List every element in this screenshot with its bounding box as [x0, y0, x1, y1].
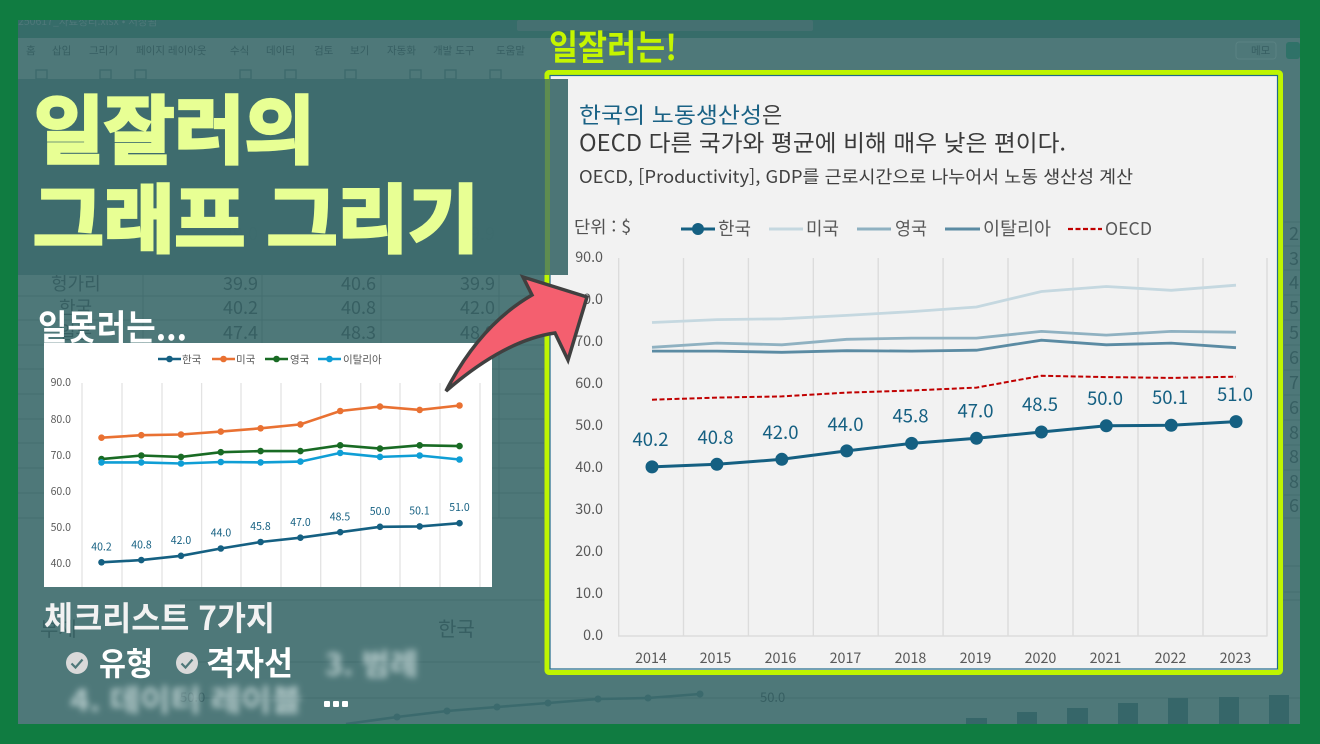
- thumbnail series: 한국: 45.8: [250, 519, 271, 534]
- faded spreadsheet background: 29.0: [223, 220, 258, 246]
- ellipsis dots: [324, 701, 348, 707]
- thumbnail series: 미국: [98, 402, 463, 441]
- thumbnail legend: [158, 352, 382, 367]
- faded spreadsheet background: 삽입: [52, 43, 71, 58]
- title text: 일잘러의: [34, 72, 315, 179]
- line chart: labour productivity: 2021: [1090, 647, 1121, 668]
- line chart: labour productivity: 50.0: [575, 414, 603, 435]
- faded spreadsheet background: 검토: [314, 43, 334, 58]
- faded spreadsheet background: 5: [1289, 319, 1299, 345]
- faded spreadsheet background: 40.2: [223, 294, 258, 320]
- thumbnail series: 한국: 50.0: [370, 504, 390, 519]
- blurred checklist item: 데이터 레이블: 4. 데이터 레이블: [70, 676, 302, 720]
- faded spreadsheet background: 40.8: [341, 294, 376, 320]
- title text: 그래프 그리기: [33, 161, 479, 268]
- chart heading: OECD 다른 국가와 평균에 비해 매우 낮은 편이다.: [579, 124, 1066, 158]
- blurred checklist item: 범례: 3. 범례: [325, 640, 418, 684]
- panel: thumbnail chart (before): 60.0: [51, 484, 71, 499]
- series: 한국: 45.8: [893, 402, 928, 428]
- legend: 영국: [895, 215, 927, 241]
- faded spreadsheet background: 한국: [59, 294, 92, 320]
- thumbnail series: 한국: 50.1: [409, 504, 430, 518]
- series: 한국: 51.0: [1217, 381, 1253, 407]
- heading: 일못러는...: 일못러는...: [38, 300, 187, 351]
- title text: [33, 72, 479, 268]
- thumbnail series: 이탈리아: [98, 450, 463, 467]
- panel: chart card with lime border: [547, 72, 1280, 672]
- faded spreadsheet background: 수식: [230, 43, 249, 58]
- faded spreadsheet background: 48.3: [341, 319, 376, 345]
- line chart: labour productivity: 10.0: [575, 582, 603, 603]
- faded spreadsheet background: 47.4: [223, 319, 258, 345]
- series: 한국: 48.5: [1022, 391, 1058, 417]
- series: 영국: [652, 331, 1236, 347]
- faded spreadsheet background: 3: [1289, 245, 1299, 271]
- series: 한국: 50.1: [1152, 384, 1188, 410]
- series: 한국: 40.8: [698, 424, 733, 450]
- checklist item: 유형: [66, 639, 153, 685]
- faded spreadsheet background: 7: [1289, 369, 1299, 395]
- faded spreadsheet background: 4: [1289, 269, 1299, 295]
- faded spreadsheet background: 부제: [40, 613, 77, 642]
- faded spreadsheet background: 개발 도구: [433, 43, 475, 58]
- series: OECD: [652, 376, 1236, 400]
- series: 한국: 47.0: [958, 398, 993, 424]
- title panel: [18, 72, 568, 275]
- faded spreadsheet background: 5: [1289, 294, 1299, 320]
- faded spreadsheet background: 보기: [350, 43, 369, 58]
- chart heading: 은: [762, 98, 782, 130]
- line chart: labour productivity: 2020: [1025, 647, 1056, 668]
- thumbnail legend: 영국: [290, 352, 310, 367]
- panel: thumbnail chart (before): 50.0: [51, 520, 71, 535]
- thumbnail series: 영국: [98, 442, 463, 462]
- line chart: labour productivity: 90.0: [575, 246, 603, 267]
- panel: thumbnail chart (before): 80.0: [51, 412, 71, 427]
- faded spreadsheet background: 6: [1289, 394, 1299, 420]
- line chart: labour productivity: 2023: [1220, 647, 1251, 668]
- faded spreadsheet background: 한국: [438, 613, 475, 642]
- thumbnail legend: 이탈리아: [343, 352, 382, 367]
- line chart: labour productivity: 20.0: [575, 540, 603, 561]
- line chart: labour productivity: 2018: [895, 647, 926, 668]
- faded spreadsheet background: 42.0: [460, 294, 495, 320]
- faded spreadsheet background: 일본: [59, 319, 92, 345]
- faded spreadsheet background: 도움말: [496, 43, 525, 58]
- faded spreadsheet background: 29.9: [460, 220, 495, 246]
- line chart: labour productivity: 2015: [700, 647, 731, 668]
- faded spreadsheet background: 29.1: [341, 220, 376, 246]
- thumbnail series: 한국: 44.0: [211, 526, 231, 540]
- line chart: labour productivity: 30.0: [575, 498, 603, 519]
- panel: thumbnail chart (before): 90.0: [51, 375, 71, 390]
- legend: 이탈리아: [983, 215, 1051, 241]
- series: 미국: [652, 285, 1236, 322]
- faded spreadsheet background: 자동화: [387, 43, 416, 58]
- line chart: labour productivity: [575, 246, 1268, 668]
- line chart: labour productivity: 2017: [830, 647, 861, 668]
- panel: thumbnail chart (before): 40.0: [51, 556, 71, 571]
- faded spreadsheet background: 39.9: [460, 270, 495, 296]
- chart heading: [579, 98, 1066, 158]
- arrow: from weak chart to good chart: [446, 277, 587, 391]
- series: 이탈리아: [652, 340, 1236, 352]
- series: 한국: 44.0: [828, 411, 863, 437]
- series: 한국: [633, 381, 1253, 473]
- thumbnail series: 한국: 48.5: [330, 510, 350, 524]
- faded spreadsheet background: 8: [1289, 419, 1299, 445]
- legend: 미국: [806, 215, 839, 241]
- thumbnail series: 한국: 47.0: [290, 515, 311, 530]
- heading: 일잘러는!: 일잘러는!: [549, 20, 677, 71]
- panel: thumbnail chart (before): [44, 343, 492, 587]
- line chart: labour productivity: 2014: [635, 647, 667, 668]
- faded spreadsheet background: 48.9: [460, 319, 495, 345]
- faded spreadsheet background: 39.9: [223, 270, 258, 296]
- thumbnail series: 한국: 40.8: [131, 538, 152, 552]
- faded spreadsheet background: 6: [1289, 492, 1299, 518]
- panel: thumbnail chart (before): 70.0: [51, 448, 71, 463]
- line chart: labour productivity: 60.0: [575, 372, 603, 393]
- line chart: labour productivity: 2019: [960, 647, 991, 668]
- series: 한국: 50.0: [1087, 385, 1123, 411]
- line chart: labour productivity: 40.0: [575, 456, 603, 477]
- legend: [681, 215, 1152, 241]
- faded spreadsheet background: 8: [1289, 468, 1299, 494]
- faded spreadsheet background: 데이터: [266, 43, 295, 58]
- thumbnail series: 한국: 51.0: [449, 500, 470, 515]
- faded spreadsheet background: 6: [1289, 344, 1299, 370]
- faded spreadsheet background: 페이지 레이아웃: [136, 43, 207, 58]
- line chart: labour productivity: 2016: [765, 647, 796, 668]
- unit label: 단위 : $: [574, 213, 631, 238]
- line chart: labour productivity: 80.0: [575, 288, 603, 309]
- faded spreadsheet background: 50.0: [180, 687, 205, 706]
- chart heading: 한국의 노동생산성: [579, 98, 762, 130]
- faded spreadsheet background: 50.0: [760, 687, 785, 706]
- checklist item: 유형: 유형: [99, 639, 153, 685]
- series: 한국: 40.2: [633, 426, 668, 452]
- thumbnail series: 한국: 42.0: [171, 533, 191, 548]
- line chart: labour productivity: 0.0: [583, 624, 603, 645]
- faded spreadsheet background: 헝가리: [51, 270, 101, 296]
- thumbnail series: 한국: 40.2: [91, 540, 112, 554]
- faded spreadsheet background: 홈: [26, 43, 36, 58]
- line chart: labour productivity: 2022: [1155, 647, 1186, 668]
- thumbnail legend: 한국: [182, 352, 202, 367]
- faded spreadsheet background: 250617_자료정리.xlsx • 저장됨: [18, 14, 157, 29]
- checklist item: 격자선: 격자선: [206, 637, 293, 685]
- thumbnail legend: 미국: [236, 352, 256, 367]
- faded spreadsheet background: 그리기: [89, 43, 118, 58]
- series: 한국: 42.0: [763, 419, 798, 445]
- faded spreadsheet background: 메모: [1251, 43, 1271, 58]
- thumbnail series: 한국: [91, 500, 470, 566]
- legend: OECD: [1105, 215, 1152, 241]
- faded spreadsheet background: 40.6: [341, 270, 376, 296]
- faded spreadsheet background: 2: [1289, 220, 1299, 246]
- checklist heading: 체크리스트 7가지: [44, 592, 275, 640]
- chart source note: OECD, [Productivity], GDP를 근로시간으로 나누어서 노동 생산성 계산: [579, 164, 1133, 189]
- faded spreadsheet background: 8: [1289, 443, 1299, 469]
- line chart: labour productivity: 70.0: [575, 330, 603, 351]
- legend: 한국: [718, 215, 751, 241]
